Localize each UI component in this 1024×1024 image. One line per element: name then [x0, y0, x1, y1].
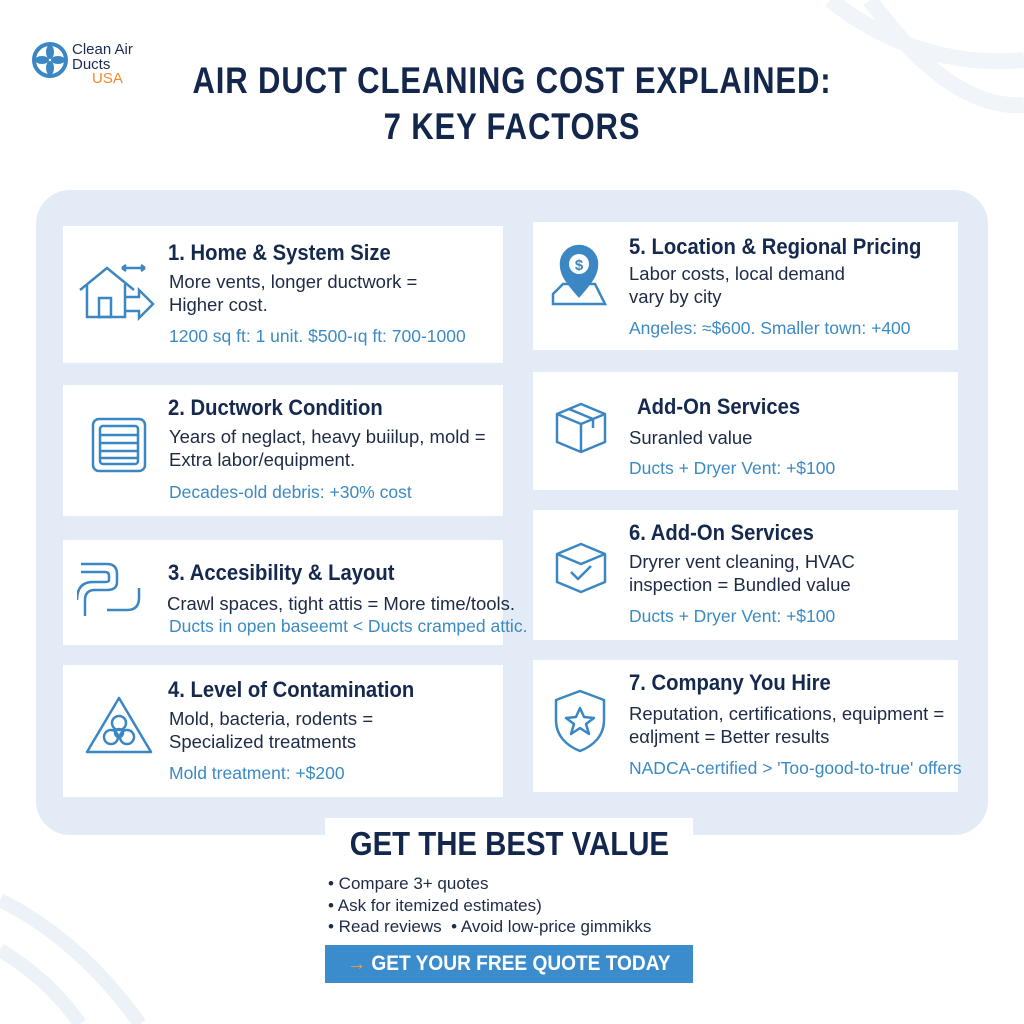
card 2: Decades-old debris: +30% cost: [169, 482, 412, 502]
card 1: 1. Home & System Size: [168, 240, 391, 265]
card 5: 5. Location & Regional Pricing: [629, 234, 921, 259]
icon: location pin: [552, 244, 607, 306]
card 4: [63, 665, 503, 797]
card 2: Years of neglact, heavy buiilup, mold =: [169, 426, 486, 447]
logo: USA: [92, 70, 123, 87]
tips list: • Compare 3+ quotes: [328, 874, 488, 893]
icon: vent: [92, 418, 146, 472]
card 7: NADCA-certified > 'Too-good-to-true' offers: [629, 758, 962, 778]
logo: [32, 41, 133, 87]
card 6: inspection = Bundled value: [629, 574, 851, 595]
title: [193, 60, 831, 147]
tips list: [328, 874, 651, 936]
tips list: • Read reviews • Avoid low-price gimmikks: [328, 917, 651, 936]
card 1: [63, 226, 503, 363]
card addon: Ducts + Dryer Vent: +$100: [629, 458, 835, 478]
title: AIR DUCT CLEANING COST EXPLAINED:: [193, 60, 831, 101]
card 6: 6. Add-On Services: [629, 520, 814, 545]
icon: shield star: [554, 690, 606, 752]
card 4: Mold, bacteria, rodents =: [169, 708, 373, 729]
logo: Clean Air: [72, 41, 133, 58]
main panel: [36, 190, 988, 835]
card 6: [533, 510, 958, 640]
title: 7 KEY FACTORS: [384, 106, 640, 147]
card 1: Higher cost.: [169, 294, 268, 315]
card 1: More vents, longer ductwork =: [169, 271, 417, 292]
icon: box check: [556, 542, 606, 594]
card 4: Specialized treatments: [169, 731, 356, 752]
tips list: • Ask for itemized estimates): [328, 896, 542, 914]
card 3: Crawl spaces, tight attis = More time/tools.: [167, 593, 515, 614]
card 5: [533, 222, 958, 350]
icon: location pin: $: [575, 257, 584, 274]
card 6: Dryrer vent cleaning, HVAC: [629, 551, 855, 572]
card 5: Angeles: ≈$600. Smaller town: +400: [629, 318, 911, 338]
card 3: 3. Accesibility & Layout: [168, 560, 394, 585]
card 1: 1200 sq ft: 1 unit. $500-ıq ft: 700-1000: [169, 326, 466, 346]
card 2: [63, 385, 503, 516]
card 3: [63, 540, 503, 645]
cta button: → GET YOUR FREE QUOTE TODAY: [347, 952, 671, 975]
icon: box: [556, 402, 606, 454]
card 2: 2. Ductwork Condition: [168, 395, 383, 420]
cta button: [325, 945, 693, 983]
card 7: [533, 660, 958, 792]
icon: biohazard: [86, 696, 152, 754]
card addon: Suranled value: [629, 427, 752, 448]
card 7: Reputation, certifications, equipment =: [629, 703, 944, 724]
logo: Ducts: [72, 56, 110, 73]
card addon: [533, 372, 958, 490]
card 6: Ducts + Dryer Vent: +$100: [629, 606, 835, 626]
card 2: Extra labor/equipment.: [169, 449, 355, 470]
card 3: Ducts in open baseemt < Ducts cramped attic.: [169, 616, 527, 636]
card 5: Labor costs, local demand: [629, 263, 845, 284]
best value heading: [325, 818, 693, 870]
card 5: vary by city: [629, 286, 722, 307]
icon: pipes: [77, 562, 140, 616]
card addon: Add-On Services: [637, 394, 800, 419]
icon: house: [79, 264, 155, 321]
card 4: 4. Level of Contamination: [168, 677, 414, 702]
best value heading: GET THE BEST VALUE: [349, 825, 669, 862]
card 7: eαljment = Better results: [629, 726, 829, 747]
card 7: 7. Company You Hire: [629, 670, 831, 695]
card 4: Mold treatment: +$200: [169, 763, 345, 783]
